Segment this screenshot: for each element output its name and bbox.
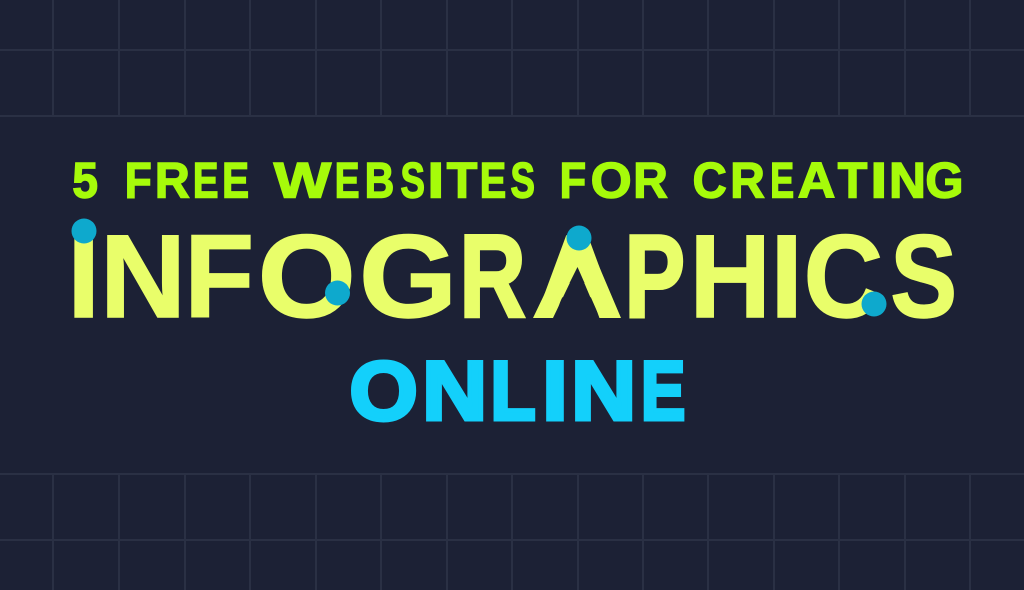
heading: infographics with decorative dots: O xyxy=(258,210,356,342)
heading: infographics with decorative dots: C xyxy=(804,212,883,343)
heading: 5 free websites for creating: R xyxy=(633,154,668,209)
heading: online: E xyxy=(641,346,685,438)
heading: 5 free websites for creating: F xyxy=(560,153,586,208)
heading: 5 free websites for creating: E xyxy=(222,152,249,209)
heading: 5 free websites for creating: I xyxy=(427,153,444,208)
heading: 5 free websites for creating: O xyxy=(591,152,632,208)
heading: infographics with decorative dots: R xyxy=(459,211,526,343)
heading: online xyxy=(350,345,685,438)
heading: infographics with decorative dots: A xyxy=(534,211,620,343)
heading: infographics with decorative dots: I xyxy=(67,211,100,343)
heading: 5 free websites for creating: N xyxy=(889,152,926,208)
heading: 5 free websites for creating: W xyxy=(274,153,332,208)
heading: 5 free websites for creating: S xyxy=(510,153,535,209)
heading: online: N xyxy=(422,346,487,438)
heading: 5 free websites for creating: E xyxy=(335,153,359,209)
heading: infographics with decorative dots: G xyxy=(359,210,457,342)
heading: infographics with decorative dots xyxy=(67,210,957,343)
heading: 5 free websites for creating: B xyxy=(365,153,394,209)
heading: 5 free websites for creating: E xyxy=(193,154,219,209)
heading: infographics with decorative dots: N xyxy=(100,211,186,343)
heading: infographics with decorative dots: F xyxy=(184,210,254,342)
heading: online: O xyxy=(350,346,418,438)
icon: dot on letter C xyxy=(862,292,886,316)
heading: 5 free websites for creating: S xyxy=(400,153,425,209)
heading: online: N xyxy=(571,346,636,438)
heading: 5 free websites for creating: C xyxy=(693,153,727,209)
heading: 5 free websites for creating: R xyxy=(155,154,190,209)
heading: infographics with decorative dots: I xyxy=(770,211,803,343)
heading: 5 free websites for creating: R xyxy=(730,154,765,209)
heading: 5 free websites for creating: F xyxy=(125,152,152,208)
heading: 5 free websites for creating xyxy=(72,152,964,209)
heading: online: L xyxy=(490,345,536,438)
heading: 5 free websites for creating: A xyxy=(798,152,835,208)
heading: infographics with decorative dots: S xyxy=(890,211,957,343)
icon: dot on letter I xyxy=(72,218,96,244)
heading: 5 free websites for creating: I xyxy=(870,153,887,208)
icon: dot on letter A xyxy=(566,226,592,250)
heading: 5 free websites for creating: 5 xyxy=(72,154,98,209)
heading: infographics with decorative dots: H xyxy=(689,212,771,343)
heading: 5 free websites for creating: T xyxy=(838,153,867,209)
heading: 5 free websites for creating: E xyxy=(480,152,506,209)
heading: infographics with decorative dots: P xyxy=(624,212,685,343)
heading: 5 free websites for creating: E xyxy=(770,154,794,209)
heading: 5 free websites for creating: G xyxy=(925,153,964,209)
icon: dot on letter O xyxy=(325,280,350,306)
heading: online: I xyxy=(542,345,568,438)
heading: 5 free websites for creating: T xyxy=(447,153,477,209)
